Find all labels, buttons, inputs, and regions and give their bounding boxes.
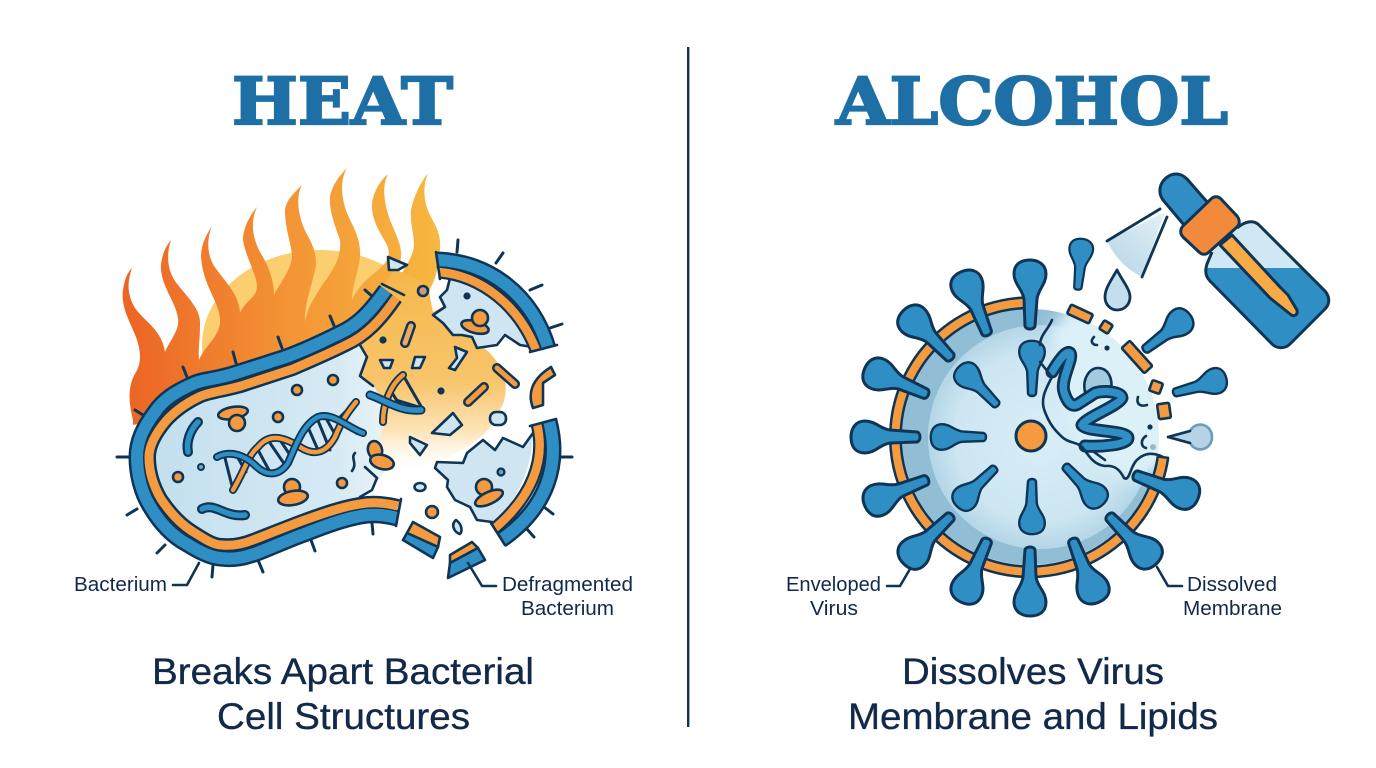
- caption: heat: Breaks Apart Bacterial: [152, 651, 534, 692]
- outer spikes: [851, 260, 1204, 616]
- bottle liquid: [1206, 268, 1329, 348]
- label: Defragmented Bacterium: Bacterium: [521, 598, 614, 620]
- white gap by fragment: [429, 274, 452, 312]
- caption: alcohol: Membrane and Lipids: [848, 696, 1218, 737]
- broken membrane pieces: [1067, 304, 1171, 419]
- debris pieces: [379, 257, 555, 578]
- spray lines: [1107, 209, 1167, 277]
- center divider: [687, 47, 689, 727]
- jagged torn edges: [352, 345, 377, 497]
- virus body: [902, 309, 1158, 565]
- leader: Dissolved Membrane: [1157, 567, 1182, 586]
- bottle outline: [1206, 222, 1329, 348]
- label: Enveloped Virus: Virus: [810, 598, 858, 620]
- illustration: alcohol dropper bottle: [1105, 174, 1329, 348]
- dropper bulb: [1160, 174, 1208, 225]
- membrane specks: [1092, 337, 1156, 450]
- spray cone: [1107, 212, 1165, 277]
- title: ALCOHOL: ALCOHOL: [835, 64, 1228, 140]
- membrane ring: [895, 303, 1169, 572]
- leader: Bacterium: [173, 563, 199, 585]
- DNA helix: [217, 375, 422, 490]
- lower right fragment: [435, 419, 556, 545]
- pipette: [1220, 235, 1297, 316]
- fade on dissolving side: [1046, 312, 1159, 486]
- label: Dissolved Membrane: Membrane: [1183, 598, 1282, 620]
- dropper collar: [1181, 197, 1239, 254]
- flames: [123, 168, 440, 425]
- caption: heat: Cell Structures: [217, 696, 470, 737]
- title: HEAT: HEAT: [232, 64, 453, 140]
- leaking blob: [1084, 368, 1111, 392]
- label: Enveloped Virus: Enveloped: [786, 574, 881, 596]
- label: Dissolved Membrane: Dissolved: [1187, 574, 1277, 596]
- virus inner body: [928, 325, 1152, 549]
- illustration: burning bacterium: [117, 168, 572, 578]
- bacterium cytoplasm: [152, 343, 388, 543]
- dissolved membrane line: [1040, 320, 1163, 479]
- label: Bacterium: Bacterium: [74, 574, 167, 596]
- caption: alcohol: Dissolves Virus: [902, 651, 1164, 692]
- detached spikes: [1066, 238, 1230, 449]
- sun glow behind flames: [202, 250, 438, 440]
- virus core: [1016, 421, 1046, 451]
- RNA squiggle: [1052, 353, 1128, 446]
- label: Defragmented Bacterium: Defragmented: [502, 574, 633, 596]
- bacterium membrane: [137, 284, 404, 559]
- orange heat glow: [345, 270, 506, 475]
- droplet: [1105, 270, 1130, 310]
- leader: Enveloped Virus: [887, 569, 910, 586]
- cell contents: organelles: [173, 375, 395, 515]
- bottle body: [1206, 222, 1329, 348]
- cell wall ticks: [117, 240, 572, 577]
- upper right fragment: [433, 252, 557, 352]
- inner spikes: [931, 341, 1112, 534]
- illustration: enveloped virus: [851, 238, 1230, 616]
- leader: Defragmented Bacterium: [468, 563, 496, 586]
